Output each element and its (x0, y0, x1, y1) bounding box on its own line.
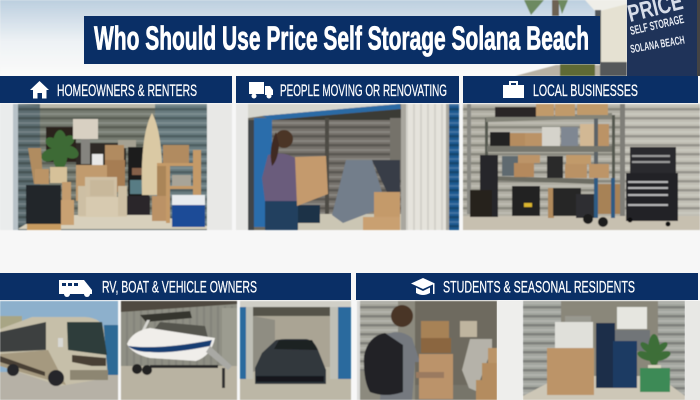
photo: packed household storage unit (0, 104, 232, 230)
icon: briefcase (503, 81, 524, 98)
panel: rv, boat and vehicle owners (0, 273, 351, 400)
photo: boat on trailer (121, 301, 237, 400)
background: storage facility scene (0, 0, 640, 76)
heading: people moving or renovating: PEOPLE MOVING OR RENOVATING (280, 81, 447, 100)
heading: homeowners and renters: HOMEOWNERS & RENTERS (57, 81, 197, 100)
title banner (84, 16, 600, 64)
heading: local businesses: LOCAL BUSINESSES (533, 81, 638, 100)
photo: bins, luggage and plant (523, 301, 685, 400)
panel: people moving or renovating (236, 76, 459, 230)
panel: local businesses (463, 76, 700, 230)
heading: homeowners and renters (0, 76, 232, 103)
photo: woman carrying a box into a unit (236, 104, 459, 230)
frame: right door jamb (685, 301, 700, 400)
panel: homeowners and renters (0, 76, 232, 230)
photo: shelving with business inventory and tool chest (463, 104, 700, 230)
frame: white door jamb (497, 301, 522, 400)
heading: students and seasonal residents (356, 273, 698, 300)
icon: house (30, 81, 49, 98)
panel: students and seasonal residents (356, 273, 700, 400)
photo: motorhome (0, 301, 118, 400)
heading: people moving or renovating (236, 76, 459, 103)
heading: rv, boat and vehicle owners: RV, BOAT & VEHICLE OWNERS (102, 278, 257, 296)
sign: Price Self Storage Solana Beach (625, 0, 700, 76)
photo: student carrying a box (357, 301, 497, 400)
heading: rv, boat and vehicle owners (0, 273, 351, 300)
icon: recreational vehicle (59, 280, 92, 297)
photo: car in storage unit (240, 301, 351, 400)
icon: moving truck (249, 82, 273, 98)
heading: local businesses (463, 76, 698, 103)
icon: graduation cap (411, 278, 435, 295)
